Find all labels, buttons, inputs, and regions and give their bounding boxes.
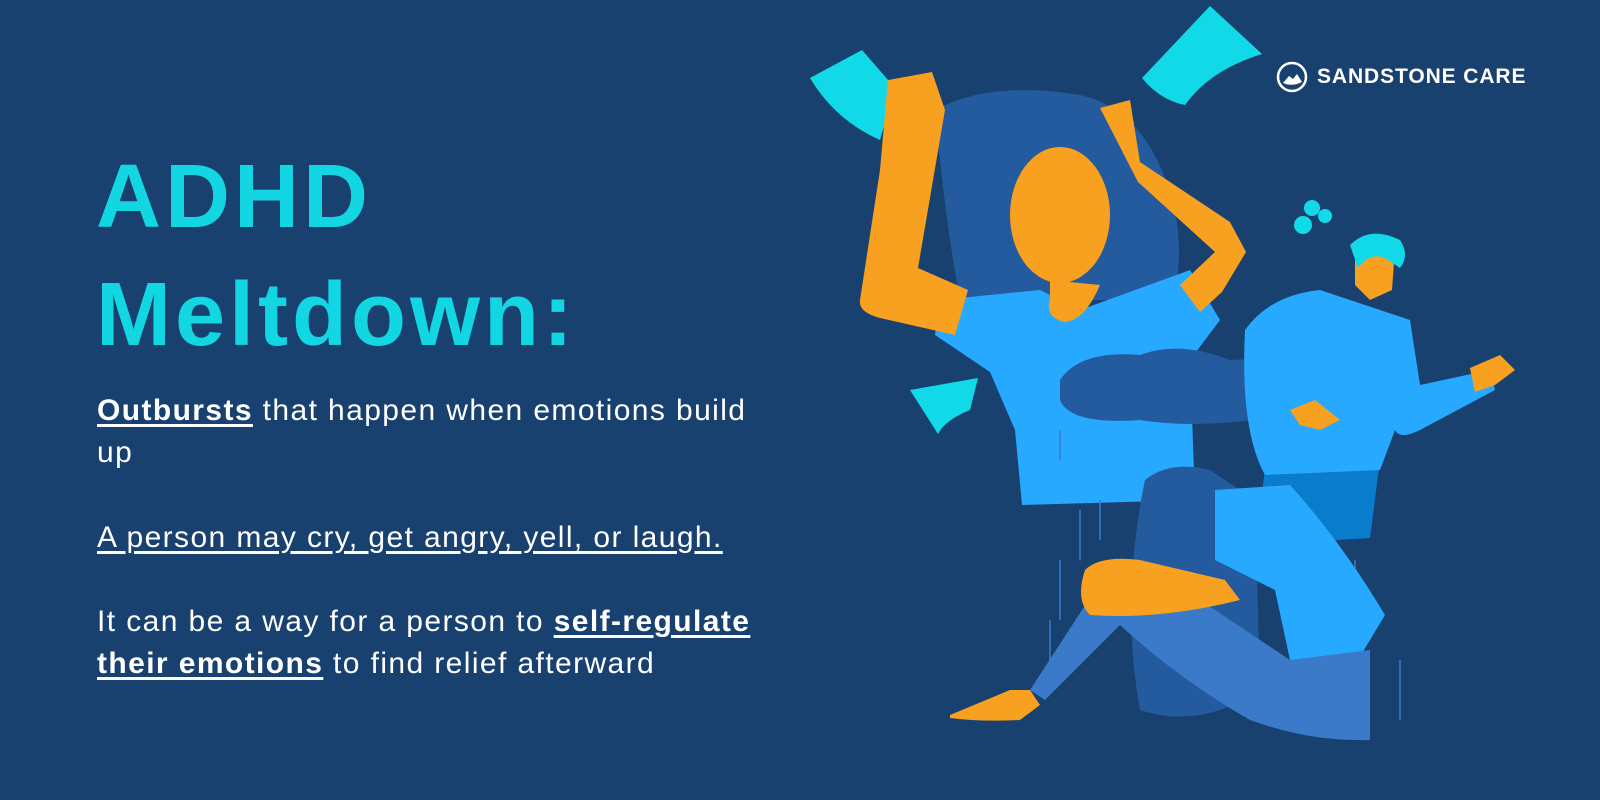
text: self-regulate: their emotions to find relief afterward: [97, 647, 655, 680]
logo: [1276, 62, 1526, 92]
text: self-regulate: [97, 605, 750, 680]
text: outbursts: [97, 394, 746, 469]
logo: SANDSTONE CARE: [1317, 65, 1526, 88]
cloud: [1060, 349, 1322, 424]
man: [1244, 200, 1515, 545]
text: behaviors: A person may cry, get angry, yell, or laugh.: [97, 521, 723, 554]
rain: [1050, 430, 1400, 720]
papers: [810, 6, 1262, 434]
text: outbursts: up: [97, 436, 133, 469]
title: Meltdown:: [96, 265, 577, 365]
sitting woman: [950, 467, 1385, 740]
title: [96, 147, 577, 365]
text: self-regulate: It can be a way for a person to self-regulate: [97, 605, 750, 638]
top woman: [860, 72, 1246, 505]
title: ADHD: [96, 147, 372, 247]
text: outbursts: Outbursts that happen when emotions build: [97, 394, 746, 427]
